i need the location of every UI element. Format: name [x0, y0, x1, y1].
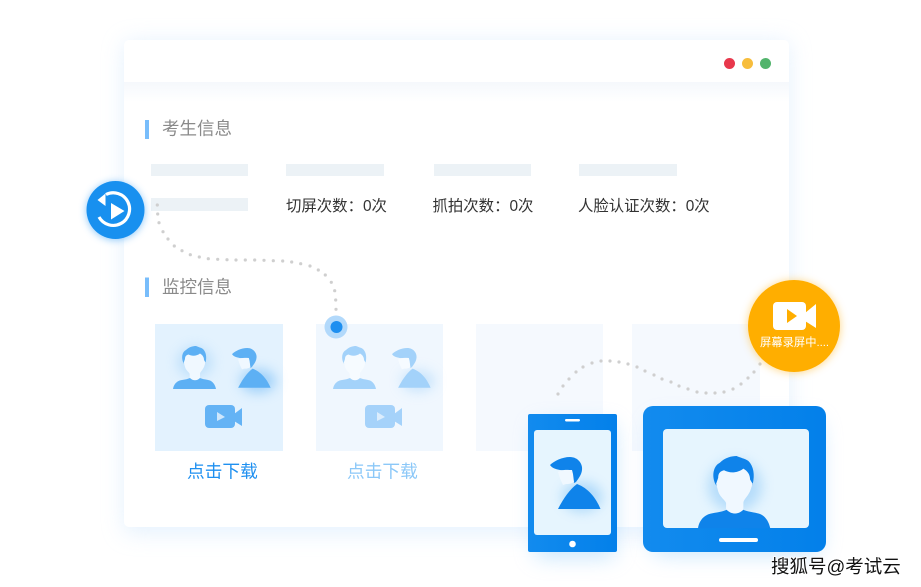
stats text row: 人脸认证次数：0次: [578, 197, 710, 215]
recording badge: [747, 280, 841, 374]
device: monitor: [643, 406, 826, 554]
icon: video camera: [365, 405, 402, 428]
person: front view: [173, 346, 216, 389]
monitoring tile 1: [155, 324, 283, 451]
recording badge: 屏幕录屏中....: [760, 335, 829, 349]
panel: main window card: [124, 40, 789, 533]
person: side view: [550, 457, 600, 509]
person: front view: [698, 456, 770, 528]
download label 1: 点击下载: [187, 462, 258, 482]
dotted connector: replay to pin: [156, 203, 338, 311]
placeholder bars: [151, 164, 677, 211]
watermark: 搜狐号@考试云: [771, 556, 901, 577]
empty tile 3: [476, 324, 603, 451]
monitoring tile 2: [316, 324, 443, 451]
stats text row: 抓拍次数：0次: [432, 197, 533, 215]
icon: video camera: [205, 405, 242, 428]
person: side view: [392, 348, 431, 388]
stats text row: [286, 197, 710, 215]
map pin marker: [324, 316, 348, 338]
stats text row: 切屏次数：0次: [286, 197, 387, 215]
person: front view: [333, 346, 376, 389]
dotted connector: tablet to recording badge: [556, 359, 762, 396]
icon: video camera: [773, 302, 816, 330]
person: side view: [232, 348, 271, 388]
device: tablet: [528, 414, 617, 557]
download label 2: 点击下载: [347, 462, 418, 482]
heading: candidate info: 考生信息: [162, 118, 232, 138]
window control dots: [724, 58, 771, 69]
heading: monitoring info: 监控信息: [162, 277, 232, 297]
icon: replay button: [86, 181, 144, 240]
empty tile 4: [632, 324, 760, 451]
